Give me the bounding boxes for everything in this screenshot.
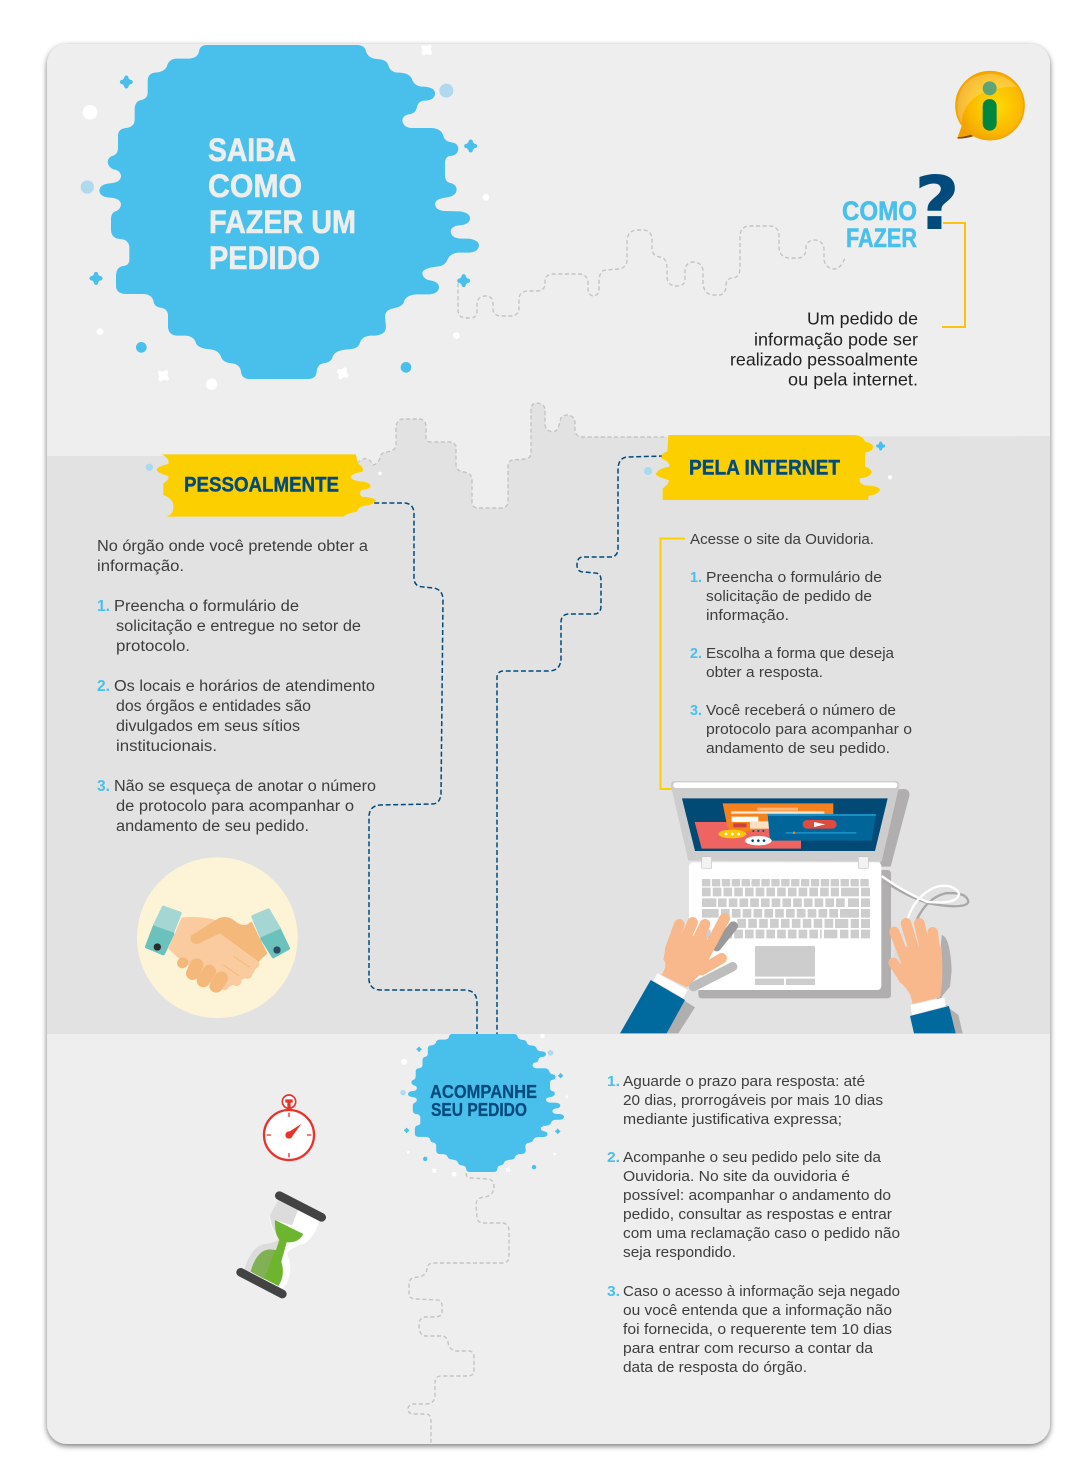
text: acompanhe: pedido, consultar as respostas e entrar [623,1207,892,1223]
text: acompanhe: seja respondido. [623,1245,736,1261]
text: acompanhe: Caso o acesso à informação seja negado [623,1284,900,1300]
icon: stopwatch [264,1095,314,1160]
text: acompanhe: 1. [607,1074,620,1090]
banner: pessoalmente: PESSOALMENTE [184,472,339,496]
text: acompanhe: Acompanhe o seu pedido pelo site da [623,1150,882,1166]
banner: pela internet [644,435,892,500]
title: SAIBA [208,132,296,168]
text: pela internet [690,532,912,757]
dashed path: bottom gray [408,1173,509,1444]
intro text: realizado pessoalmente [730,350,918,370]
text: pessoalmente: 1. [97,598,110,615]
dashed path: navy right [497,456,664,1036]
text: pessoalmente: protocolo. [116,638,190,655]
heading: acompanhe seu pedido [430,1082,537,1120]
text: acompanhe: Ouvidoria. No site da ouvidoria é [623,1169,850,1185]
text: pessoalmente: No órgão onde você pretende obter a [97,538,368,555]
text: pela internet: Acesse o site da Ouvidoria. [690,532,874,548]
heading: como fazer: FAZER [846,223,917,253]
text: pela internet: solicitação de pedido de [706,589,872,605]
blob: main title [81,44,489,390]
text: acompanhe: ou você entenda que a informação não [623,1303,892,1319]
middle band [47,403,1050,1034]
banner: pessoalmente [146,454,382,517]
intro text: Um pedido de [807,308,918,328]
text: pessoalmente: institucionais. [116,738,217,755]
text: acompanhe: 3. [607,1284,620,1300]
text: pela internet: informação. [706,608,789,624]
bracket: pela internet [660,538,685,789]
heading: como fazer: COMO [842,196,917,226]
text: pessoalmente: Preencha o formulário de [114,598,299,615]
text: pessoalmente: Não se esqueça de anotar o número [114,778,376,795]
text: pela internet: Preencha o formulário de [706,570,882,586]
question mark: ? [914,161,960,247]
text: acompanhe: 2. [607,1150,620,1166]
screen [671,781,899,862]
keyboard base [689,857,881,990]
text: acompanhe [607,1074,900,1376]
text: pessoalmente: de protocolo para acompanhar o [116,798,354,815]
text: pessoalmente: divulgados em seus sítios [116,718,300,735]
dashed path: top gray [458,226,845,318]
text: pela internet: obter a resposta. [706,665,823,681]
text: pela internet: andamento de seu pedido. [706,741,890,757]
text: acompanhe: Aguarde o prazo para resposta: até [623,1074,865,1090]
heading: acompanhe seu pedido: SEU PEDIDO [431,1100,527,1120]
text: pessoalmente [97,538,376,835]
title: FAZER UM [209,204,356,240]
base shadow [698,870,891,998]
title [208,132,356,276]
cable [882,876,968,920]
blob: acompanhe [400,1034,568,1177]
text: pessoalmente: Os locais e horários de atendimento [114,678,375,695]
text: pessoalmente: dos órgãos e entidades são [116,698,311,715]
text: acompanhe: possível: acompanhar o andamento do [623,1188,891,1204]
text: pessoalmente: 3. [97,778,110,795]
text: pela internet: Você receberá o número de [706,703,896,719]
title: PEDIDO [209,240,320,276]
screen shadow [880,789,909,867]
text: pessoalmente: informação. [97,558,184,575]
text: acompanhe: para entrar com recurso a contar da [623,1341,874,1357]
icon: hourglass [241,1196,322,1294]
text: pessoalmente: 2. [97,678,110,695]
intro text: ou pela internet. [788,370,918,390]
bracket [942,223,965,327]
text: pessoalmente: solicitação e entregue no setor de [116,618,361,635]
dashed path: middle gray [357,403,666,508]
heading: como fazer [842,196,917,253]
text: pela internet: 3. [690,703,702,719]
text: acompanhe: data de resposta do órgão. [623,1360,807,1376]
text: acompanhe: foi fornecida, o requerente tem 10 dias [623,1322,892,1338]
left hand [620,918,733,1033]
text: pela internet: 2. [690,646,702,662]
text: pela internet: Escolha a forma que deseja [706,646,895,662]
dashed path: navy left [359,503,477,1036]
intro text [730,308,918,390]
icon: info bubble [956,72,1024,140]
text: acompanhe: mediante justificativa expressa; [623,1112,842,1128]
intro text: informação pode ser [754,330,918,350]
text: pela internet: protocolo para acompanhar o [706,722,912,738]
right hand [893,923,963,1033]
icon: laptop with hands [620,781,968,1033]
text: pessoalmente: andamento de seu pedido. [116,818,309,835]
banner: pela internet: PELA INTERNET [689,456,840,480]
text: pela internet: 1. [690,570,702,586]
heading: acompanhe seu pedido: ACOMPANHE [430,1082,537,1102]
text: acompanhe: 20 dias, prorrogáveis por mais 10 dias [623,1093,883,1109]
icon: handshake [137,857,298,1018]
text: acompanhe: com uma reclamação caso o pedido não [623,1226,900,1242]
title: COMO [208,168,302,204]
